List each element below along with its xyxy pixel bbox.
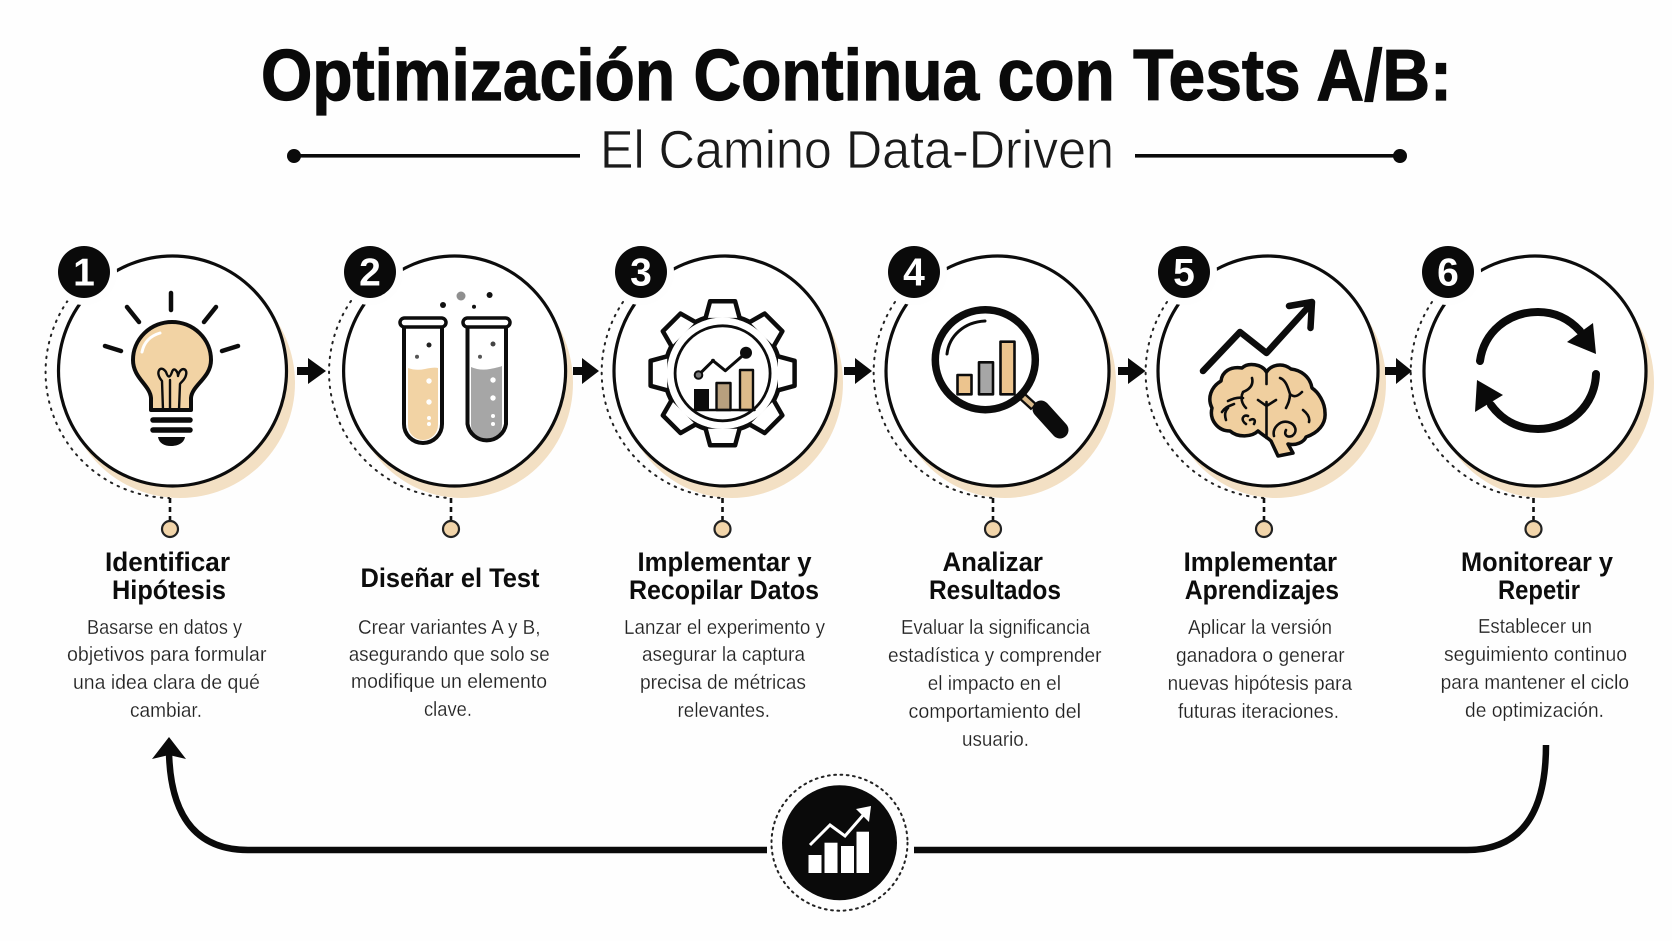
step 4 text: el impacto en el	[928, 672, 1061, 695]
step 3 text: asegurar la captura	[642, 643, 806, 666]
step 4 text: Evaluar la significancia	[901, 616, 1091, 639]
circle 5 with number badge: 5	[1173, 252, 1195, 294]
icon: magnifier over bar chart	[935, 310, 1060, 430]
step 1 text: objetivos para formular	[67, 643, 267, 666]
panel: step 4	[874, 239, 1116, 751]
step 2 text: asegurando que solo se	[349, 643, 550, 666]
panel: step 3	[602, 239, 843, 722]
connector node	[162, 498, 178, 537]
panel: step 5	[1146, 239, 1386, 723]
step 2 text: modifique un elemento	[351, 670, 547, 693]
step 5 heading	[1184, 547, 1339, 605]
icon: test tubes	[400, 292, 510, 443]
connector node	[714, 498, 730, 537]
circle 6 with number badge	[1411, 239, 1654, 498]
step 5 heading: Aprendizajes	[1185, 575, 1339, 605]
step 5 text: futuras iteraciones.	[1178, 700, 1339, 723]
circle 4 with number badge	[874, 239, 1116, 498]
step 1 heading	[105, 547, 230, 605]
circle 5 with number badge	[1146, 239, 1386, 498]
title: Optimización Continua con Tests A/B:	[261, 36, 1452, 116]
step 4 text: comportamiento del	[908, 700, 1081, 723]
arrow 2 to 3	[573, 358, 599, 384]
icon: white growth chart	[808, 806, 871, 873]
step 4 heading: Resultados	[929, 575, 1061, 605]
circle 3 with number badge: 3	[630, 252, 652, 294]
circle 1 with number badge	[46, 239, 295, 498]
connector node	[985, 498, 1001, 537]
circle 1 with number badge: 1	[73, 252, 95, 294]
step 5 heading: Implementar	[1184, 547, 1337, 577]
connector node	[1526, 498, 1542, 537]
step 5 text: ganadora o generar	[1176, 644, 1345, 667]
center chart badge	[772, 775, 908, 911]
step 6 text	[1441, 615, 1629, 722]
step 1 text: una idea clara de qué	[73, 671, 260, 694]
step 4 text: usuario.	[962, 728, 1029, 751]
step 6 heading: Monitorear y	[1461, 547, 1613, 577]
step 6 heading: Repetir	[1498, 575, 1580, 605]
step 2 text: Crear variantes A y B,	[358, 616, 540, 639]
step 4 text	[888, 616, 1102, 751]
arrow 5 to 6	[1385, 358, 1412, 384]
step 3 heading: Recopilar Datos	[629, 575, 819, 605]
step 3 heading	[629, 547, 819, 605]
step 6 text: Establecer un	[1478, 615, 1592, 638]
panel: step 1	[46, 239, 295, 722]
step 4 heading: Analizar	[942, 547, 1043, 577]
step 4 heading	[929, 547, 1061, 605]
step 6 text: para mantener el ciclo	[1441, 671, 1629, 694]
circle 6 with number badge: 6	[1437, 252, 1459, 294]
step 6 text: seguimiento continuo	[1444, 643, 1627, 666]
connector node	[1256, 498, 1272, 537]
step 6 text: de optimización.	[1465, 699, 1604, 722]
arrow 3 to 4	[844, 358, 872, 384]
feedback loop arrow	[152, 737, 1546, 850]
step 1 heading: Hipótesis	[112, 575, 226, 605]
step 2 text: clave.	[424, 698, 472, 721]
panel: step 2	[329, 239, 573, 721]
arrow 4 to 5	[1118, 358, 1146, 384]
step 2 heading: Diseñar el Test	[360, 563, 540, 593]
circle 2 with number badge: 2	[359, 252, 381, 294]
connector node	[443, 498, 459, 537]
icon: gear with chart	[651, 301, 795, 445]
step 3 text	[624, 616, 826, 722]
panel: step 6	[1411, 239, 1654, 722]
step 3 text: precisa de métricas	[640, 671, 806, 694]
step 2 text	[349, 616, 550, 721]
step 4 text: estadística y comprender	[888, 644, 1102, 667]
step 6 heading	[1461, 547, 1613, 605]
icon: growth arrow and brain	[1203, 302, 1325, 456]
arrow 1 to 2	[297, 358, 326, 384]
step 1 text: Basarse en datos y	[87, 616, 243, 639]
circle 3 with number badge	[602, 239, 843, 498]
step 5 text: Aplicar la versión	[1188, 616, 1332, 639]
step 1 heading: Identificar	[105, 547, 230, 577]
step 3 text: Lanzar el experimento y	[624, 616, 826, 639]
step 1 text: cambiar.	[130, 699, 202, 722]
step 5 text	[1168, 616, 1353, 723]
step 1 text	[67, 616, 267, 722]
step 3 heading: Implementar y	[638, 547, 812, 577]
circle 2 with number badge	[329, 239, 573, 498]
step 3 text: relevantes.	[678, 699, 770, 722]
subtitle with rules: El Camino Data-Driven	[600, 120, 1114, 180]
subtitle with rules	[287, 120, 1407, 180]
icon: light bulb	[105, 293, 238, 446]
icon: refresh arrows	[1475, 312, 1596, 429]
step 5 text: nuevas hipótesis para	[1168, 672, 1353, 695]
circle 4 with number badge: 4	[903, 252, 925, 294]
